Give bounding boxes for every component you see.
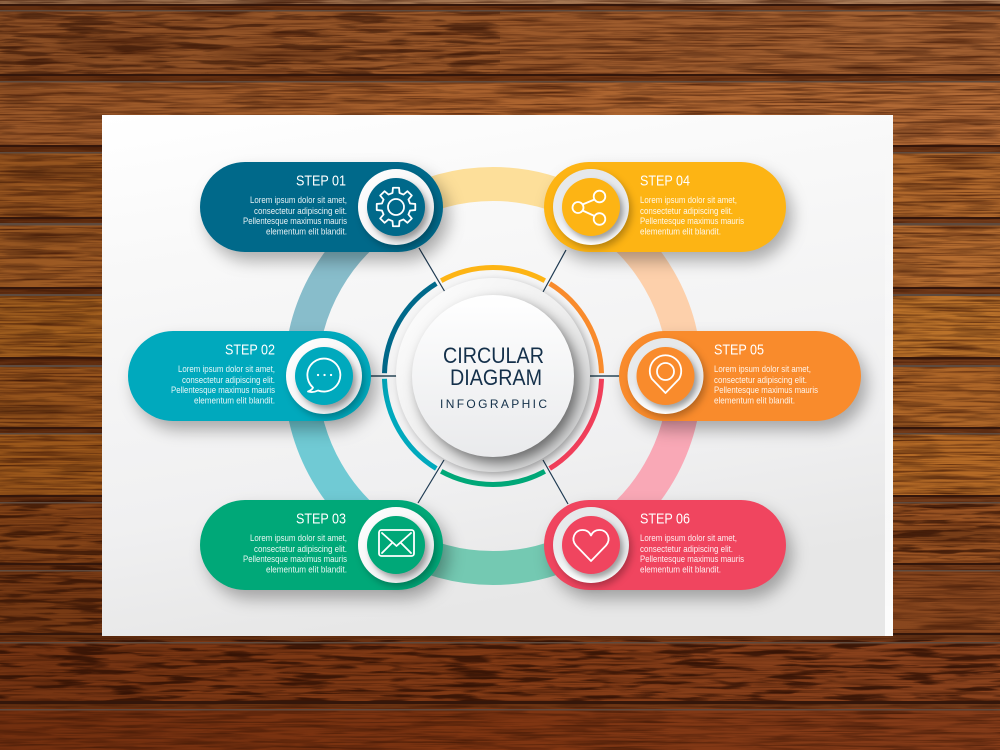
step 04 text: consectetur adipiscing elit. — [640, 206, 733, 216]
step 02 text: Lorem ipsum dolor sit amet, — [178, 364, 275, 374]
step 02 text: consectetur adipiscing elit. — [182, 375, 275, 385]
icon: gear — [377, 188, 415, 226]
step 02 text: Pellentesque maximus mauris — [171, 385, 275, 395]
icon: heart — [573, 530, 609, 561]
title: INFOGRAPHIC — [440, 397, 547, 411]
outer ring — [301, 184, 685, 568]
ring segment: green — [397, 542, 589, 568]
white paper panel — [102, 115, 893, 636]
step 06 text — [640, 510, 744, 574]
panel: step 03 — [200, 500, 443, 590]
step 06 text: elementum elit blandit. — [640, 564, 721, 574]
step 06 text: Lorem ipsum dolor sit amet, — [640, 533, 737, 543]
step 02 text: STEP 02 — [225, 342, 275, 358]
step 05 text: elementum elit blandit. — [714, 396, 795, 406]
step 02 text: elementum elit blandit. — [194, 396, 275, 406]
step 04 text: Pellentesque maximus mauris — [640, 216, 744, 226]
step 06 text: consectetur adipiscing elit. — [640, 544, 733, 554]
panel: step 05 — [619, 331, 861, 421]
step 05 text: STEP 05 — [714, 342, 764, 358]
step 06 text: STEP 06 — [640, 510, 690, 528]
step 04 text: elementum elit blandit. — [640, 226, 721, 236]
title: CIRCULAR — [443, 343, 544, 368]
ring segment: pink — [589, 376, 685, 542]
icon: share — [572, 191, 605, 225]
panel: step 02 — [128, 331, 371, 421]
step 01 text: Lorem ipsum dolor sit amet, — [250, 195, 347, 205]
step 03 text: consectetur adipiscing elit. — [254, 544, 347, 554]
step 05 text — [714, 342, 818, 406]
step 03 text — [243, 510, 347, 574]
centre disc — [396, 278, 590, 472]
step 01 text: consectetur adipiscing elit. — [254, 206, 347, 216]
title: DIAGRAM — [450, 365, 542, 390]
step 03 text: STEP 03 — [296, 510, 346, 528]
step 01 text: STEP 01 — [296, 172, 346, 190]
icon: map pin — [650, 355, 681, 393]
icon: envelope — [379, 530, 414, 556]
panel: step 01 — [200, 162, 443, 252]
icon: chat bubble — [307, 359, 340, 392]
step 04 text: Lorem ipsum dolor sit amet, — [640, 195, 737, 205]
step 05 text: Pellentesque maximus mauris — [714, 385, 818, 395]
step 05 text: consectetur adipiscing elit. — [714, 375, 807, 385]
ring segment: cyan — [301, 376, 397, 542]
ring segment: orange — [589, 210, 685, 376]
connector lines — [370, 248, 620, 504]
step 05 text: Lorem ipsum dolor sit amet, — [714, 364, 811, 374]
inner coloured arcs — [384, 268, 602, 484]
step 01 text: Pellentesque maximus mauris — [243, 216, 347, 226]
step 03 text: elementum elit blandit. — [266, 564, 347, 574]
title — [440, 343, 547, 411]
step 02 text — [171, 342, 275, 406]
step 01 text: elementum elit blandit. — [266, 226, 347, 236]
ring segment: teal — [301, 210, 397, 376]
step 03 text: Lorem ipsum dolor sit amet, — [250, 533, 347, 543]
step 04 text: STEP 04 — [640, 172, 690, 190]
ring segment: yellow — [397, 184, 589, 210]
step 06 text: Pellentesque maximus mauris — [640, 554, 744, 564]
step 01 text — [243, 172, 347, 236]
panel: step 04 — [544, 162, 786, 252]
panel: step 06 — [544, 500, 786, 590]
step 04 text — [640, 172, 744, 236]
step 03 text: Pellentesque maximus mauris — [243, 554, 347, 564]
